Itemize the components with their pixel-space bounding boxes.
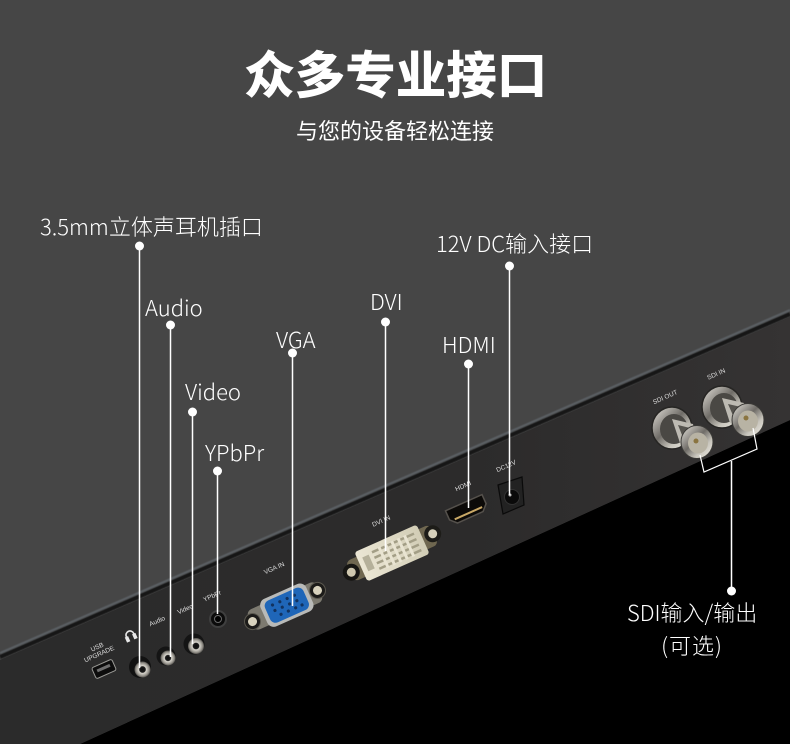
port: VGA in [239,561,331,638]
black floor below the monitor [80,420,790,744]
callout: SDI input/output: (可选) [661,629,723,661]
callout: VGA [276,323,316,606]
port: USB upgrade [83,642,116,679]
port: DVI in [337,514,447,589]
callout: 12V DC input [436,227,593,495]
port: Video jack: Video [176,603,195,616]
callout: YPbPr: YPbPr [205,436,264,468]
callout: HDMI [442,328,496,508]
callout: VGA: VGA [276,323,316,355]
icon: headphones [124,629,137,642]
callout: DVI [370,285,403,551]
port: Audio jack [148,615,176,666]
port: SDI in: SDI IN [706,367,727,382]
connector strip of the monitor [0,310,790,744]
port: HDMI: HDMI [454,480,473,493]
callout: 12V DC input: 12V DC输入接口 [436,227,593,259]
callout: 3.5mm headphone jack: 3.5mm立体声耳机插口 [40,210,263,242]
port: YPbPr jack [202,589,226,627]
port: SDI in [702,367,764,436]
port: SDI out [652,389,713,458]
title: 众多专业接口 [244,36,548,108]
port: SDI out: SDI OUT [652,389,679,406]
callout: HDMI: HDMI [442,328,496,360]
port: USB upgrade: UPGRADE [83,645,116,664]
callout: SDI input/output: SDI输入/输出 [627,596,757,628]
subtitle: 与您的设备轻松连接 [296,114,494,146]
port: HDMI [445,480,489,525]
port: 3.5mm headphone jack [129,656,151,678]
port: DVI in: DVI IN [371,514,392,529]
callout: 3.5mm headphone jack [40,210,263,668]
callout: YPbPr [205,436,264,614]
callout: DVI: DVI [370,285,403,317]
port: Video jack [176,603,204,654]
callout: SDI input/output [627,428,757,661]
port: USB upgrade: USB [90,642,105,654]
callout: Audio [145,291,203,657]
callout: Video: Video [185,375,241,407]
callout: Audio: Audio [145,291,203,323]
port: DC 12V [495,459,524,514]
port: YPbPr jack: YPbPr [202,589,223,604]
port: VGA in: VGA IN [263,561,286,576]
port: Audio jack: Audio [148,615,167,628]
callout: Video [185,375,241,644]
port: DC 12V: DC12V [495,459,518,474]
